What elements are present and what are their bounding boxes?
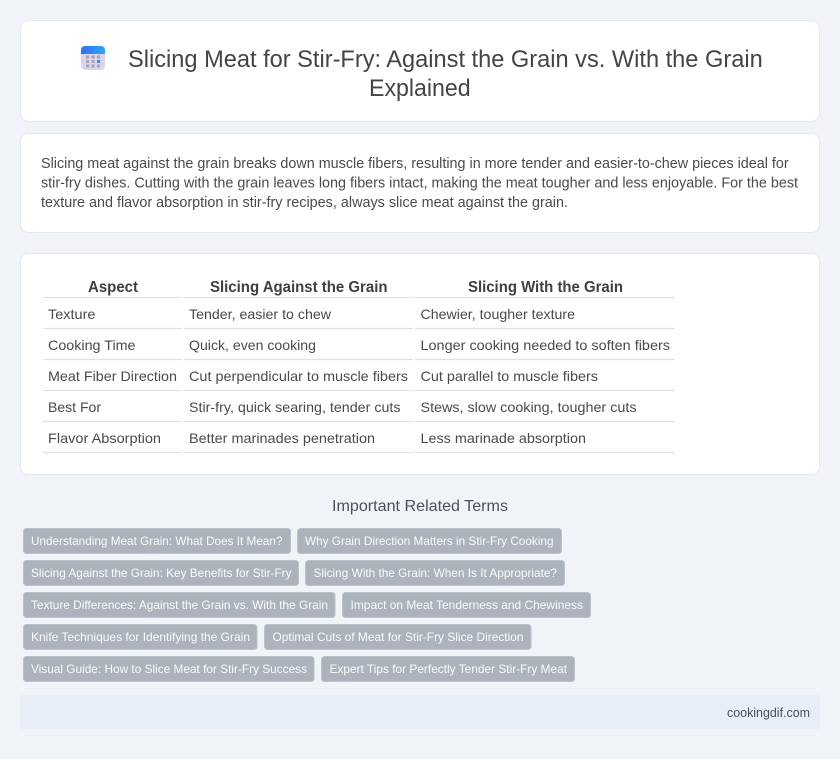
table row: flavor absorption: Flavor Absorption bbox=[48, 430, 161, 446]
tag bbox=[306, 560, 564, 586]
text block: introduction: stir-fry dishes. Cutting with the grain leaves long fibers intact, making the meat tougher and less enjoyable. For the best bbox=[41, 176, 798, 192]
related terms tag list bbox=[24, 528, 590, 682]
title bbox=[128, 46, 763, 102]
text block: introduction: Slicing meat against the grain breaks down muscle fibers, resulting in more tender and easier-to-chew pieces ideal for bbox=[41, 156, 789, 172]
tag: Visual Guide: How to Slice Meat for Stir-Fry Success bbox=[31, 662, 307, 676]
tag bbox=[264, 624, 531, 650]
table row: cooking time: Longer cooking needed to soften fibers bbox=[420, 337, 670, 353]
heading: important related terms: Important Related Terms bbox=[332, 498, 508, 515]
table row: best for: Best For bbox=[48, 399, 101, 415]
tag: Knife Techniques for Identifying the Grain bbox=[31, 630, 250, 644]
tag bbox=[298, 528, 562, 554]
table row: best for: Stir-fry, quick searing, tender cuts bbox=[189, 399, 400, 415]
panel: comparison table bbox=[20, 254, 820, 474]
table row: best for bbox=[48, 399, 636, 415]
tag bbox=[24, 656, 314, 682]
tag: Understanding Meat Grain: What Does It Mean? bbox=[31, 534, 283, 548]
title: Slicing Meat for Stir-Fry: Against the Grain vs. With the Grain bbox=[128, 46, 763, 73]
table header row: Aspect bbox=[88, 279, 138, 296]
tag bbox=[24, 528, 290, 554]
table row: texture: Tender, easier to chew bbox=[189, 306, 332, 322]
tag: Impact on Meat Tenderness and Chewiness bbox=[350, 598, 583, 612]
panel: title header bbox=[20, 20, 820, 122]
tag: Expert Tips for Perfectly Tender Stir-Fry Meat bbox=[330, 662, 568, 676]
icon: calendar bbox=[81, 46, 105, 70]
tag: Slicing With the Grain: When Is It Appropriate? bbox=[314, 566, 557, 580]
footer source text: cookingdif.com bbox=[727, 706, 810, 720]
tag bbox=[24, 560, 298, 586]
panel: intro paragraph bbox=[20, 134, 820, 232]
tag: Texture Differences: Against the Grain vs. With the Grain bbox=[31, 598, 328, 612]
table row: cooking time: Cooking Time bbox=[48, 337, 136, 353]
table row: texture: Chewier, tougher texture bbox=[420, 306, 575, 322]
tag bbox=[24, 592, 335, 618]
text block: introduction: texture and flavor absorption in stir-fry recipes, always slice meat against the grain. bbox=[41, 195, 568, 211]
table row: texture: Texture bbox=[48, 306, 96, 322]
tag: Slicing Against the Grain: Key Benefits for Stir-Fry bbox=[31, 566, 292, 580]
tag: Why Grain Direction Matters in Stir-Fry Cooking bbox=[305, 534, 554, 548]
table row: flavor absorption: Better marinades penetration bbox=[189, 430, 375, 446]
table row: flavor absorption bbox=[48, 430, 586, 446]
table row: texture bbox=[48, 306, 575, 322]
table row: cooking time: Quick, even cooking bbox=[189, 337, 316, 353]
table row: best for: Stews, slow cooking, tougher cuts bbox=[420, 399, 636, 415]
table row: cooking time bbox=[48, 337, 670, 353]
footer bar bbox=[20, 695, 820, 729]
table header row bbox=[88, 279, 623, 296]
table header row: Slicing Against the Grain bbox=[210, 279, 388, 296]
table row: meat fiber direction bbox=[48, 368, 598, 384]
tag bbox=[24, 624, 257, 650]
title: Explained bbox=[369, 75, 471, 102]
table row: meat fiber direction: Cut parallel to muscle fibers bbox=[420, 368, 598, 384]
table row: flavor absorption: Less marinade absorption bbox=[420, 430, 586, 446]
tag bbox=[322, 656, 574, 682]
tag bbox=[342, 592, 590, 618]
text block: introduction bbox=[41, 156, 798, 211]
table header row: Slicing With the Grain bbox=[468, 279, 623, 296]
tag: Optimal Cuts of Meat for Stir-Fry Slice Direction bbox=[272, 630, 524, 644]
table row: meat fiber direction: Meat Fiber Direction bbox=[48, 368, 177, 384]
table row: meat fiber direction: Cut perpendicular to muscle fibers bbox=[189, 368, 408, 384]
